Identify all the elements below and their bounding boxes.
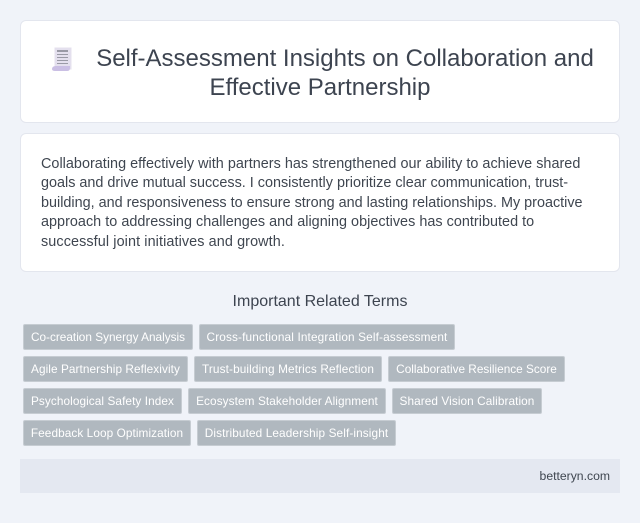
summary text: approach to addressing challenges and aligning objectives has contributed to <box>41 214 534 230</box>
title <box>96 45 594 101</box>
summary text: building, and responsiveness to ensure strong and lasting relationships. My proactive <box>41 195 583 211</box>
footer bar <box>20 459 620 493</box>
related terms tags: Ecosystem Stakeholder Alignment <box>196 394 378 408</box>
related terms tags: Shared Vision Calibration <box>400 394 534 408</box>
related terms tags: Agile Partnership Reflexivity <box>31 362 180 376</box>
related terms tags: Feedback Loop Optimization <box>31 426 183 440</box>
related terms tags: Co-creation Synergy Analysis <box>31 330 185 344</box>
related terms tags: Psychological Safety Index <box>31 394 174 408</box>
heading: important related terms: Important Related Terms <box>233 293 407 310</box>
summary text <box>41 156 583 250</box>
related terms tags: Distributed Leadership Self-insight <box>205 426 388 440</box>
title: Effective Partnership <box>209 74 430 101</box>
icon: document scroll <box>52 48 72 71</box>
related terms tags <box>23 324 565 446</box>
summary text: goals and drive mutual success. I consistently prioritize clear communication, trust- <box>41 175 568 191</box>
summary panel <box>20 133 620 272</box>
title: Self-Assessment Insights on Collaboration and <box>96 45 594 72</box>
related terms tags: Trust-building Metrics Reflection <box>202 362 374 376</box>
summary text: successful joint initiatives and growth. <box>41 234 285 250</box>
footer text: betteryn.com <box>540 469 610 483</box>
header panel <box>20 20 620 123</box>
summary text: Collaborating effectively with partners has strengthened our ability to achieve shared <box>41 156 580 172</box>
related terms tags: Cross-functional Integration Self-assessment <box>207 330 447 344</box>
related terms tags: Collaborative Resilience Score <box>396 362 557 376</box>
